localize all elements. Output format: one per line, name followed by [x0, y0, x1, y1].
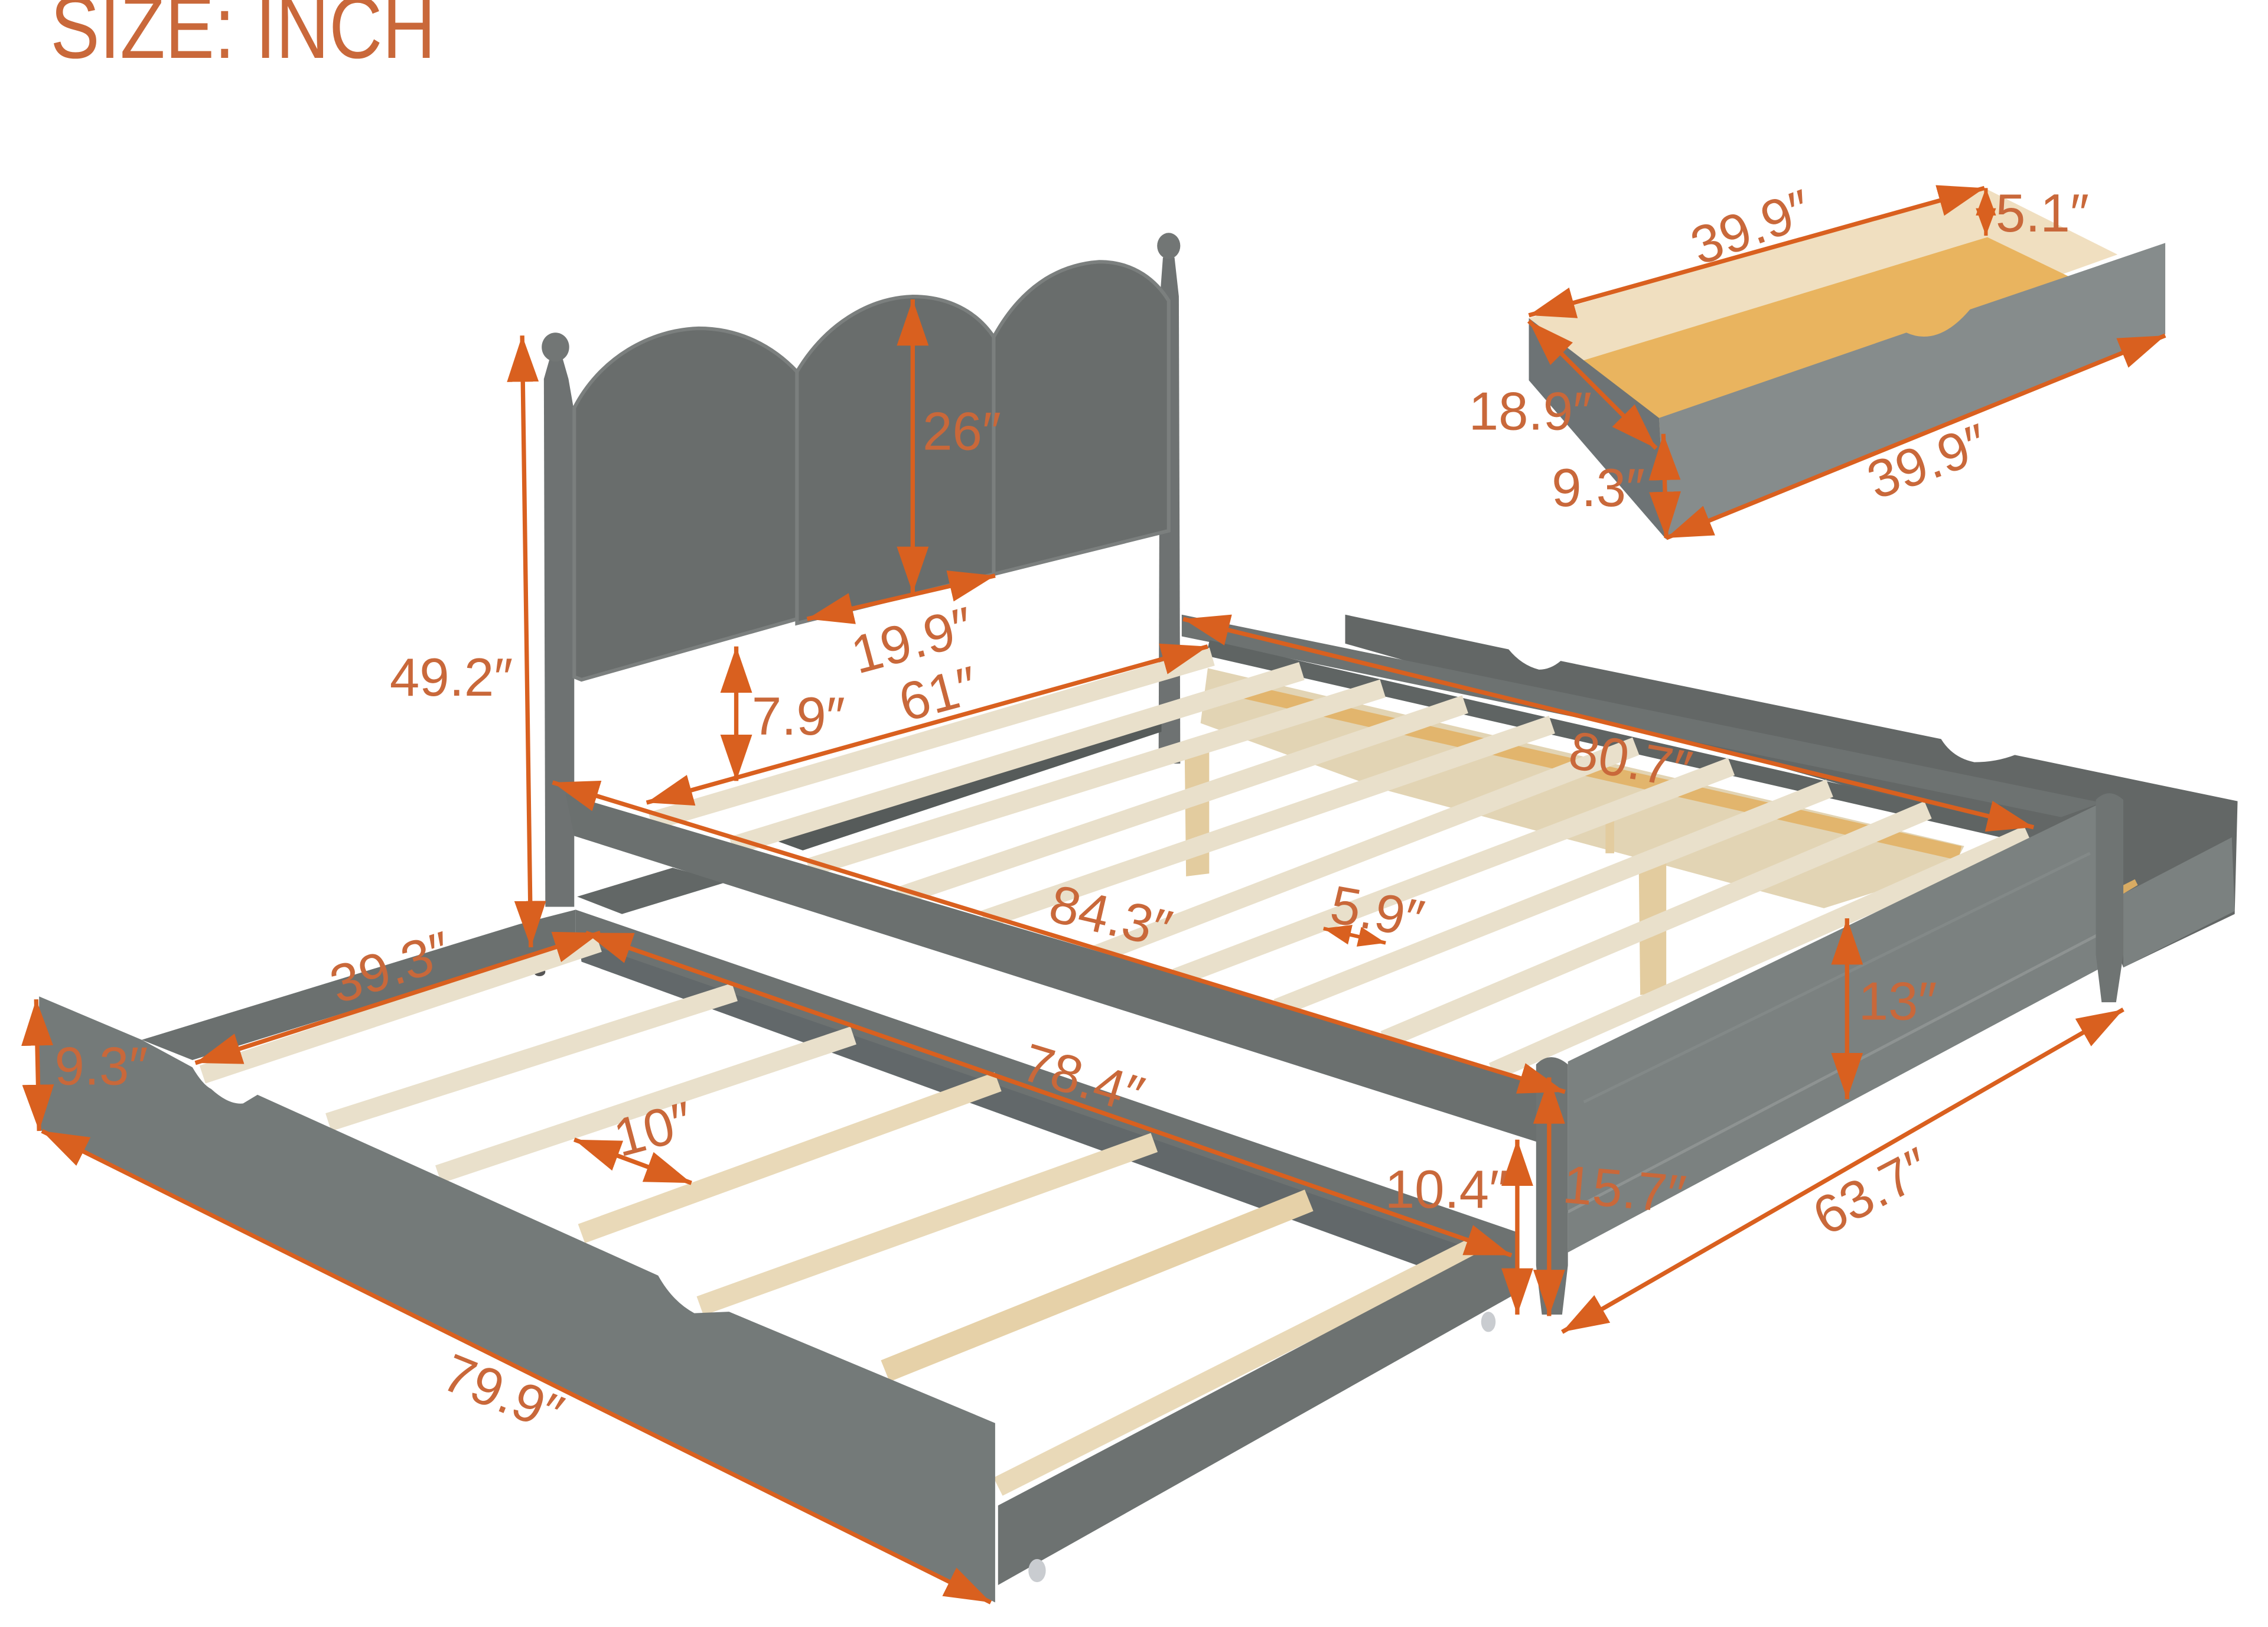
dimension labels: 19.9″	[845, 596, 979, 686]
dimension labels: 9.3″	[1552, 458, 1645, 518]
arrow: overall height	[522, 335, 531, 947]
far side rail	[1182, 615, 2101, 833]
dimension labels: 79.9″	[435, 1343, 571, 1444]
trundle lower rail	[579, 940, 1490, 1266]
dimension labels: 61″	[893, 655, 984, 733]
arrow: outer length	[553, 782, 1565, 1092]
dimension labels: 39.3″	[323, 920, 458, 1015]
arrow: rail height	[1548, 1077, 1550, 1316]
arrow: drawer height	[1663, 434, 1666, 538]
dimension labels: 15.7″	[1560, 1155, 1689, 1225]
rear foot	[534, 967, 545, 976]
arrow: drawer back length	[1529, 188, 1984, 315]
trundle slats	[203, 943, 599, 1075]
arrow: outer width	[1562, 1009, 2123, 1332]
arrow: drawer inner height	[1985, 188, 1987, 236]
arrow: trundle height	[36, 999, 39, 1131]
arrow: trundle inner length	[586, 933, 1511, 1256]
dimension labels: 39.9″	[1860, 413, 1996, 511]
arrow: clearance	[735, 647, 737, 781]
centre panel	[797, 296, 993, 623]
arrow: slat gap	[1324, 928, 1386, 943]
arrow: drawer front length	[1666, 335, 2165, 538]
arrow: bed width	[647, 647, 1208, 803]
arrow: trundle width	[195, 933, 600, 1063]
dimension labels: 63.7″	[1804, 1136, 1940, 1247]
dimension labels: 78.4″	[1015, 1032, 1151, 1126]
footboard	[1536, 793, 2123, 1315]
dimension labels: 7.9″	[752, 687, 845, 746]
drawer inset	[1529, 188, 2165, 539]
head rail	[767, 716, 1162, 850]
trundle left rail	[142, 909, 576, 1060]
trundle	[39, 909, 1517, 1602]
near side rail	[566, 794, 1539, 1143]
dimension labels: 49.2″	[390, 648, 513, 707]
arrow: trundle clearance	[1516, 1140, 1518, 1315]
support beam and legs	[1185, 668, 1964, 995]
arrow: trundle length	[42, 1131, 991, 1602]
dimension labels: 9.3″	[54, 1037, 148, 1097]
dimension labels: 10″	[608, 1091, 699, 1168]
left post	[544, 358, 574, 907]
left panel	[574, 328, 797, 680]
dimension labels: 26″	[923, 402, 1001, 462]
arrow: drawer depth	[1529, 321, 1656, 448]
drawer inner wall	[1529, 188, 2117, 418]
dimension labels	[54, 178, 2089, 1444]
bed drawers behind far rail	[1345, 615, 2238, 967]
right panel	[993, 262, 1169, 574]
headboard	[542, 233, 1180, 907]
right knob	[1157, 233, 1180, 259]
dimension labels: 18.9″	[1469, 382, 1592, 441]
dimension labels: 84.3″	[1044, 874, 1177, 960]
casters	[1028, 1559, 1046, 1582]
dimension labels: 13″	[1859, 971, 1937, 1031]
dimension labels: 5.1″	[1996, 184, 2089, 243]
trundle far rail	[576, 909, 1517, 1253]
dimension labels: 80.7″	[1565, 720, 1696, 800]
dimension labels: 5.9″	[1326, 875, 1428, 950]
left knob	[542, 332, 569, 361]
trundle side rail	[998, 1232, 1517, 1585]
trundle front panel	[39, 996, 995, 1602]
footboard right post	[2096, 793, 2123, 1002]
dimension labels: 10.4″	[1385, 1160, 1508, 1220]
right headboard post	[1159, 257, 1180, 764]
arrow: footboard height	[1846, 918, 1848, 1099]
footboard centre post	[1536, 1057, 1568, 1315]
connector rail	[577, 868, 726, 914]
drawer side	[1529, 318, 1666, 539]
arrow: headboard height	[912, 299, 914, 593]
dimension labels: 39.9″	[1683, 178, 1819, 276]
drawer front	[1659, 243, 2165, 539]
arrow: trundle slat gap	[574, 1140, 692, 1183]
arrow: panel width	[807, 576, 995, 619]
arrow: inner length	[1183, 619, 2034, 827]
bed slats	[651, 657, 2028, 1072]
drawer floor	[1579, 237, 2083, 448]
